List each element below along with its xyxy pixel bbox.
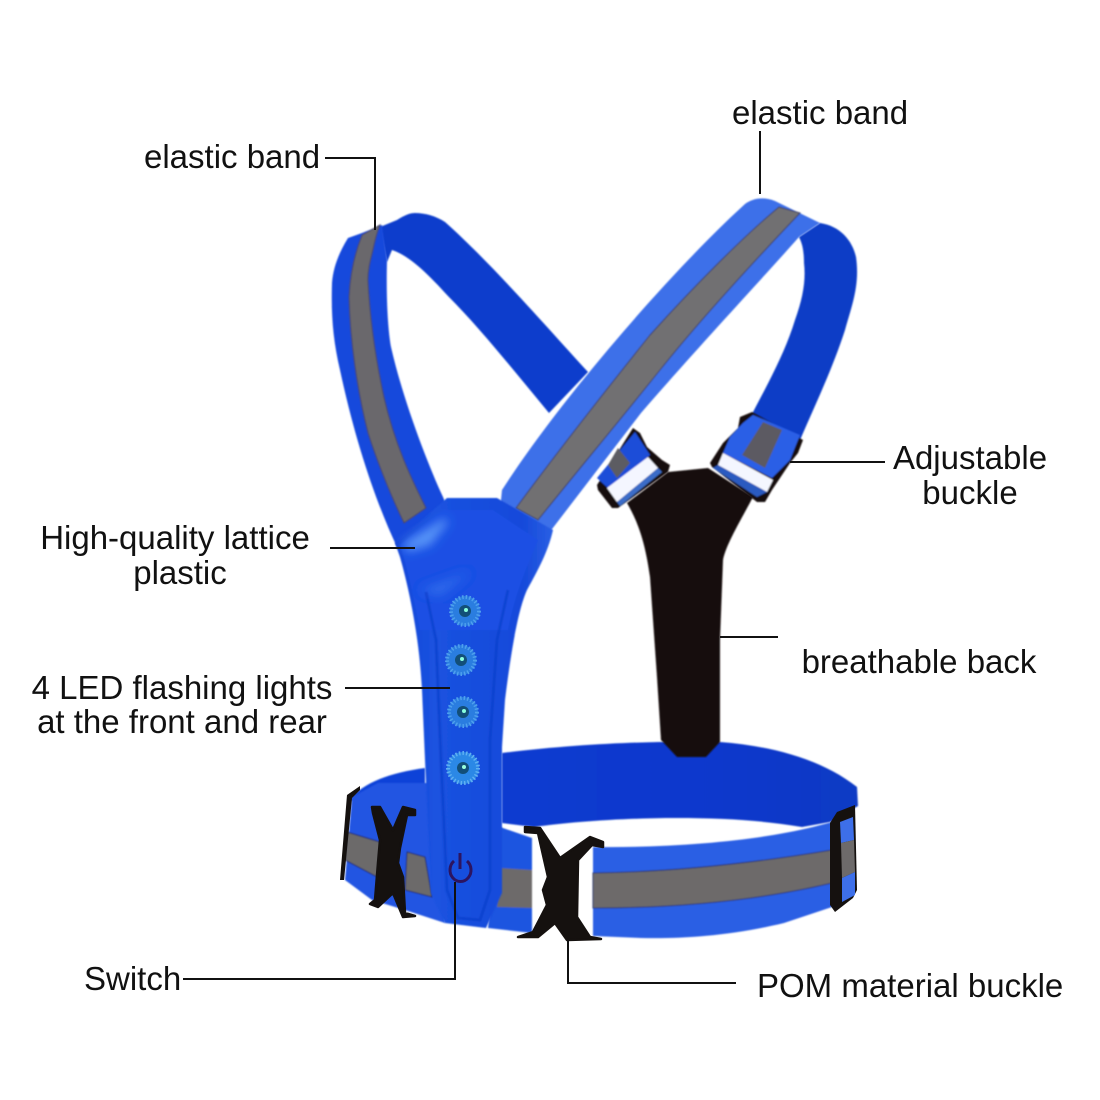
LED 4 [447, 752, 479, 784]
callout: 4 LED flashing lights [32, 669, 450, 740]
callout: adjustable buckle [790, 439, 1047, 511]
left X belt buckle [370, 807, 415, 917]
callout: adjustable buckle: buckle [922, 474, 1018, 511]
callout: breathable back: breathable back [802, 643, 1037, 680]
callout: POM material buckle [568, 940, 1063, 1004]
vest illustration [332, 198, 858, 940]
right front strap with reflective stripe [500, 198, 820, 533]
right back strap [752, 223, 857, 440]
LED 1 [450, 596, 480, 626]
callout: POM material buckle: POM material buckle [757, 967, 1063, 1004]
callout: elastic band left [144, 138, 375, 230]
power switch icon [450, 853, 471, 882]
LED 3 [448, 697, 478, 727]
callout: high-quality lattice plastic: High-quality lattice [40, 519, 310, 556]
callout: adjustable buckle: Adjustable [893, 439, 1047, 476]
callout: high-quality lattice plastic [40, 519, 415, 591]
left adjustable buckle [597, 428, 670, 508]
callout: elastic band left: elastic band [144, 138, 320, 175]
left belt end slider [340, 786, 360, 880]
right belt end slider [830, 805, 857, 912]
callout: 4 LED flashing lights: 4 LED flashing lights [32, 669, 332, 706]
right X belt buckle [518, 827, 603, 940]
central lattice plastic panel [395, 498, 553, 928]
callout: 4 LED flashing lights: at the front and rear [37, 703, 327, 740]
waist belt: back section [349, 742, 858, 827]
callout: switch: Switch [84, 960, 181, 997]
callout: elastic band right: elastic band [732, 94, 908, 131]
front waist belt, right section [593, 822, 832, 938]
callout: high-quality lattice plastic: plastic [133, 554, 227, 591]
LED 2 [446, 645, 476, 675]
black breathable back panel [627, 468, 753, 757]
front waist belt, left section [345, 783, 445, 923]
LED lights [446, 596, 480, 784]
right adjustable buckle [710, 412, 803, 502]
callout: switch [84, 882, 455, 997]
left back strap [380, 213, 588, 413]
front waist belt, middle section [488, 827, 532, 933]
left front strap with reflective stripe [332, 225, 449, 547]
